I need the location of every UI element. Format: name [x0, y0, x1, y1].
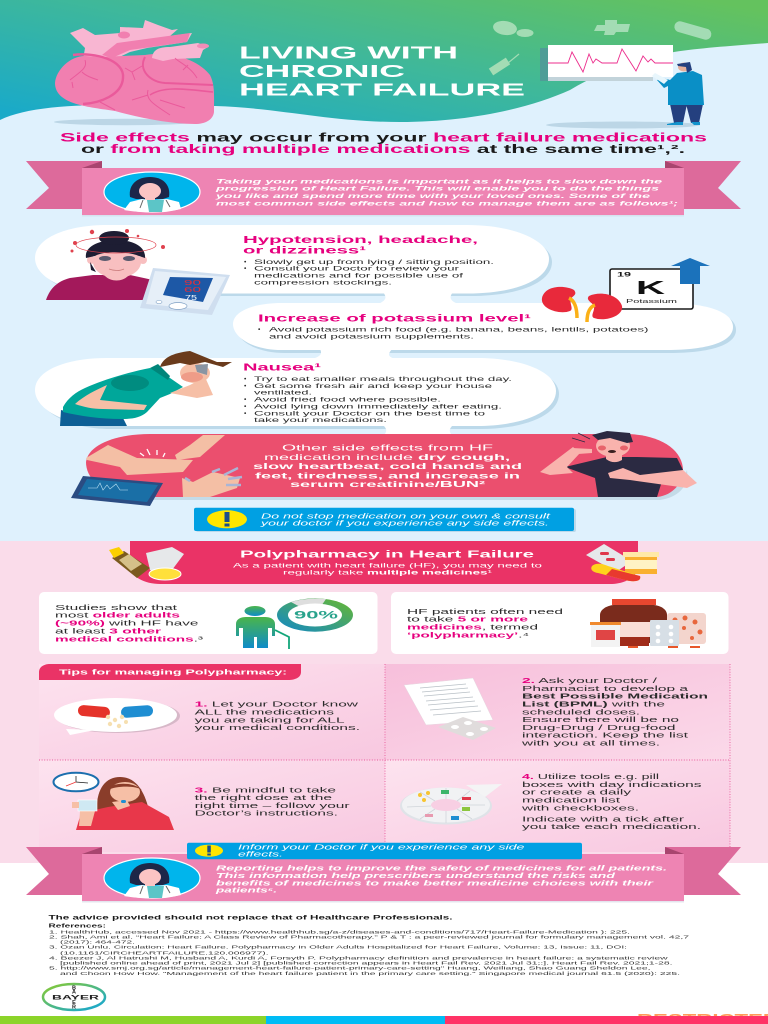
title [239, 42, 525, 100]
panel: polypharmacy card: medicines , termed [407, 623, 538, 632]
icon: pill box [400, 784, 502, 824]
panel: polypharmacy header: regularly take multiple medicines ¹ [283, 570, 494, 577]
panel: polypharmacy card: to take 5 or more [407, 615, 528, 624]
panel: potassium bubble: • [258, 327, 261, 334]
monitor with ECG [540, 45, 673, 81]
text: other side effects: feet, tiredness, and increase in [255, 470, 520, 480]
panel: hypotension bubble: compression stockings. [254, 280, 392, 287]
text: tip 4: medication list [522, 795, 620, 804]
icon: capsule [673, 20, 713, 41]
panel: hypotension bubble: Slowly get up from lying / sitting position. [254, 259, 494, 266]
panel: hypotension bubble: Consult your Doctor to review your [254, 266, 461, 273]
disclaimer: The advice provided should not replace that of Healthcare Professionals. [48, 915, 453, 922]
panel: potassium bubble: Increase of potassium level¹ [258, 314, 532, 325]
panel: other side effects [71, 431, 697, 506]
panel: nausea bubble: ventilated. [254, 390, 312, 397]
panel: reporting ribbon: benefits of medicines to make better medicine choices with their [216, 880, 656, 887]
text: tip 4: boxes with day indications [522, 780, 702, 789]
callout: do not stop medication: your doctor if you experience any side effects. [259, 520, 549, 527]
panel: reporting ribbon [26, 847, 741, 902]
text: tip 4 [520, 772, 702, 831]
icon: syringe [491, 54, 519, 72]
references: [published online ahead of print, 2021 Jul 2] [published correction appears in Heart Fail Rev. 2021 Jul 31;:]. Heart Fail Rev. 2021;1-28. [60, 961, 672, 967]
icon: up arrow [671, 258, 710, 284]
connector [383, 425, 453, 435]
icon: medical cross [594, 20, 630, 35]
Bayer logo: E [72, 1000, 76, 1006]
icon: potassium element box: Potassium [626, 299, 677, 305]
panel: nausea bubble: Avoid fried food where possible. [254, 397, 441, 404]
text: tip 2: 2. Ask your Doctor / [522, 676, 659, 685]
panel: nausea bubble: • [244, 376, 247, 383]
connector [312, 349, 395, 359]
text: tip 4: you take each medication. [522, 822, 701, 831]
icon: blood pressure monitor: 75 [185, 295, 197, 302]
text: tip 3: right time – follow your [195, 801, 351, 810]
icon: clock [54, 773, 98, 791]
icon: bottle and blister [109, 547, 184, 580]
title: LIVING WITH [239, 42, 458, 62]
icon: elderly person [236, 606, 289, 649]
panel: polypharmacy card: HF patients often need [407, 607, 563, 616]
text: tip 2: List (BPML) with the [522, 699, 665, 708]
icon: potassium element box: K [636, 278, 665, 298]
tips tab heading [39, 664, 301, 680]
text: tip 2: Drug-Drug / Drug-food [522, 723, 676, 732]
references: 3. Ozan Unlu. Circulation: Heart Failure. Polypharmacy in Older Adults Hospitalized for Heart Failure, Volume: 13, Issue: 11, DOI: [49, 945, 627, 951]
references: 5. http://www.smj.org.sg/article/management-heart-failure-patient-primary-care-setting" Huang, Weiliang, Shao Guang Sheldon Lee, [49, 966, 650, 972]
icon: medication list with blister [404, 678, 496, 740]
callout: do not stop medication: Do not stop medication on your own & consult [261, 513, 552, 520]
text: tip 4: Indicate with a tick after [522, 814, 685, 823]
panel: intro ribbon [26, 161, 741, 216]
panel: polypharmacy header: As a patient with heart failure (HF), you may need to [233, 563, 543, 570]
illustration: nauseous man [60, 351, 232, 426]
panel: intro ribbon: most common side effects and how to manage them are as follows¹; [216, 200, 678, 207]
Bayer logo: BAYER [52, 994, 99, 1002]
panel: older adults card: Studies show that [55, 603, 177, 612]
chart: 90 percent ring [277, 598, 353, 632]
callout: inform your doctor: effects. [238, 852, 283, 859]
panel: reporting ribbon: This information help prescribers understand the risks and [216, 873, 616, 880]
text: tip 1 [195, 700, 360, 732]
panel: reporting ribbon: Reporting helps to improve the safety of medicines for all patients. [216, 866, 667, 873]
panel: older adults card [39, 592, 378, 654]
text: tip 2: with you at all times. [520, 738, 660, 747]
references: (2017): 464-472. [60, 940, 135, 946]
panel: nausea bubble: Try to eat smaller meals throughout the day. [254, 376, 512, 383]
references [48, 924, 690, 977]
panel: nausea bubble: Nausea¹ [243, 363, 322, 374]
panel: older adults card: medical conditions .³ [55, 634, 204, 643]
illustration: cold hand [182, 468, 242, 497]
title: HEART FAILURE [239, 80, 525, 100]
panel: potassium bubble [233, 303, 733, 359]
panel: potassium bubble: Avoid potassium rich food (e.g. banana, beans, lentils, potatoes) [269, 327, 648, 334]
icon: potassium element box: 19 [617, 272, 632, 278]
text: tip 1: 1. Let your Doctor know [195, 700, 360, 709]
callout: do not stop medication [194, 508, 576, 532]
text: tip 2: Pharmacist to develop a [522, 684, 690, 693]
icon: medicine bottles [590, 599, 706, 647]
text: other side effects: Other side effects from HF [282, 443, 493, 453]
text: tip 2: Ensure there will be no [522, 715, 679, 724]
icon: blood pressure monitor [140, 268, 230, 315]
title: CHRONIC [239, 61, 406, 81]
references: 2. Shah, Ami et al. “Heart Failure: A Class Review of Pharmacotherapy.” P & T : a peer-reviewed journal for formulary management vol. 42,7 [49, 935, 690, 941]
text: tip 1: you are taking for ALL [195, 715, 345, 724]
panel: intro ribbon: Taking your medications is important as it helps to slow down the [216, 178, 663, 185]
tips tab heading: Tips for managing Polypharmacy: [59, 668, 287, 677]
text: tip 3: 3. Be mindful to take [195, 785, 336, 794]
panel: nausea bubble: Get some fresh air and keep your house [254, 383, 493, 390]
footer colour bar [0, 1016, 768, 1024]
panel: older adults card: (~90%) with HF have [55, 619, 198, 628]
icon: blood pressure monitor: 60 [184, 285, 201, 294]
panel: hypotension bubble: • [244, 259, 247, 266]
illustration: woman taking pill [72, 777, 174, 830]
illustration: dizzy woman [46, 229, 165, 300]
references: and Choon How How. “Management of the heart failure patient in the primary care setting.” Singapore medical journal 61.5 (2020): 225. [60, 971, 680, 977]
icon: potassium element box [610, 269, 693, 309]
chart: 90 percent ring: 90% [294, 610, 338, 622]
panel: nausea bubble: Avoid lying down immediately after eating. [254, 403, 502, 410]
illustration: tablet [71, 476, 163, 506]
panel: hypotension bubble: medications and for possible use of [254, 273, 463, 280]
panel: older adults card: most older adults [55, 611, 180, 620]
panel: polypharmacy header [130, 541, 638, 584]
references: 4. Beezer J, Al Hatrushi M, Husband A, Kurdi A, Forsyth P. Polypharmacy definition and prevalence in heart failure: a systematic review [49, 955, 669, 961]
panel: polypharmacy header: Polypharmacy in Heart Failure [240, 549, 535, 560]
panel: polypharmacy card [391, 592, 728, 654]
subtitle: Side effects may occur from your heart failure medications [60, 132, 707, 144]
text: tip 3: Doctor’s instructions. [195, 809, 338, 818]
panel: nausea bubble: take your medications. [254, 417, 387, 424]
panel: nausea bubble: • [244, 410, 247, 417]
icon: doctor avatar [104, 858, 200, 898]
icon: blood pressure monitor: 90 [184, 278, 201, 287]
text: tip 2 [520, 676, 708, 747]
text: tip 3: the right dose at the [195, 793, 332, 802]
text: tip 1: ALL the medications [195, 707, 335, 716]
text: tip 2: interaction. Keep the list [522, 731, 688, 740]
subtitle: or from taking multiple medications at the same time¹,². [81, 144, 685, 156]
panel: tips background [39, 664, 730, 852]
Bayer logo: B [72, 986, 76, 992]
references: (10.1161/CIRCHEARTFAILURE.120.006977). [60, 950, 269, 956]
icon: heart illustration [54, 20, 214, 125]
icon: round pill [492, 19, 534, 37]
illustration: coughing man [540, 431, 697, 497]
references: References: [48, 924, 107, 930]
panel: hypotension bubble [35, 225, 549, 304]
text: other side effects: medication include dry cough, [264, 452, 510, 462]
text: tip 1: your medical conditions. [195, 723, 360, 732]
callout: inform your doctor: Inform your Doctor if you experience any side [238, 844, 525, 851]
references: 1. HealthHub, accessed Nov 2021 - https://www.healthhub.sg/a-z/diseases-and-conditions/717/Heart-Failure-Medication ): 225. [49, 930, 630, 936]
connector [378, 292, 458, 304]
panel: nausea bubble: Consult your Doctor on the best time to [254, 410, 486, 417]
icon: speech bubble with capsules [54, 698, 180, 735]
icon: exclamation [207, 510, 247, 528]
text: tip 4: or create a daily [522, 788, 632, 797]
panel: nausea bubble: • [244, 383, 247, 390]
panel: hypotension bubble: or dizziness¹ [243, 246, 367, 256]
Bayer logo: R [72, 1004, 76, 1010]
callout: inform your doctor [187, 843, 582, 859]
text: tip 3 [195, 785, 351, 818]
icon: exclamation [195, 845, 223, 857]
text: tip 2: Best Possible Medication [522, 692, 708, 701]
text: tip 2: scheduled doses. [522, 707, 640, 716]
text: other side effects: slow heartbeat, cold hands and [253, 461, 522, 471]
text: other side effects: serum creatinine/BUN² [290, 479, 486, 489]
panel: nausea bubble [35, 358, 556, 435]
panel: polypharmacy card: ‘polypharmacy’ .⁴ [407, 631, 529, 640]
bubble shadows [38, 228, 736, 429]
panel: older adults card: at least 3 other [55, 626, 161, 635]
Bayer logo: A [72, 990, 76, 996]
panel: hypotension bubble: • [244, 266, 247, 273]
Bayer logo [43, 984, 105, 1010]
panel: intro ribbon: progression of Heart Failure. This will enable you to do the things [214, 186, 660, 193]
icon: capsules and jar [586, 544, 659, 581]
doctor figure [546, 62, 704, 128]
panel: nausea bubble: • [244, 397, 247, 404]
panel: intro ribbon: you like and spend more time with your loved ones. Some of the [214, 193, 651, 200]
illustration: foot and hand [86, 435, 225, 475]
panel: potassium bubble: and avoid potassium supplements. [269, 334, 474, 341]
header wave banner [0, 0, 768, 122]
text: other side effects [253, 443, 522, 489]
panel: nausea bubble: • [244, 403, 247, 410]
subtitle [60, 132, 707, 156]
icon: doctor avatar [104, 172, 200, 212]
panel: hypotension bubble: Hypotension, headache, [243, 235, 478, 246]
text: tip 4: 4. Utilize tools e.g. pill [522, 772, 660, 781]
icon: kidneys [542, 287, 622, 322]
panel: reporting ribbon: patients⁵. [214, 887, 277, 894]
text: tip 4: with checkboxes. [520, 803, 639, 812]
